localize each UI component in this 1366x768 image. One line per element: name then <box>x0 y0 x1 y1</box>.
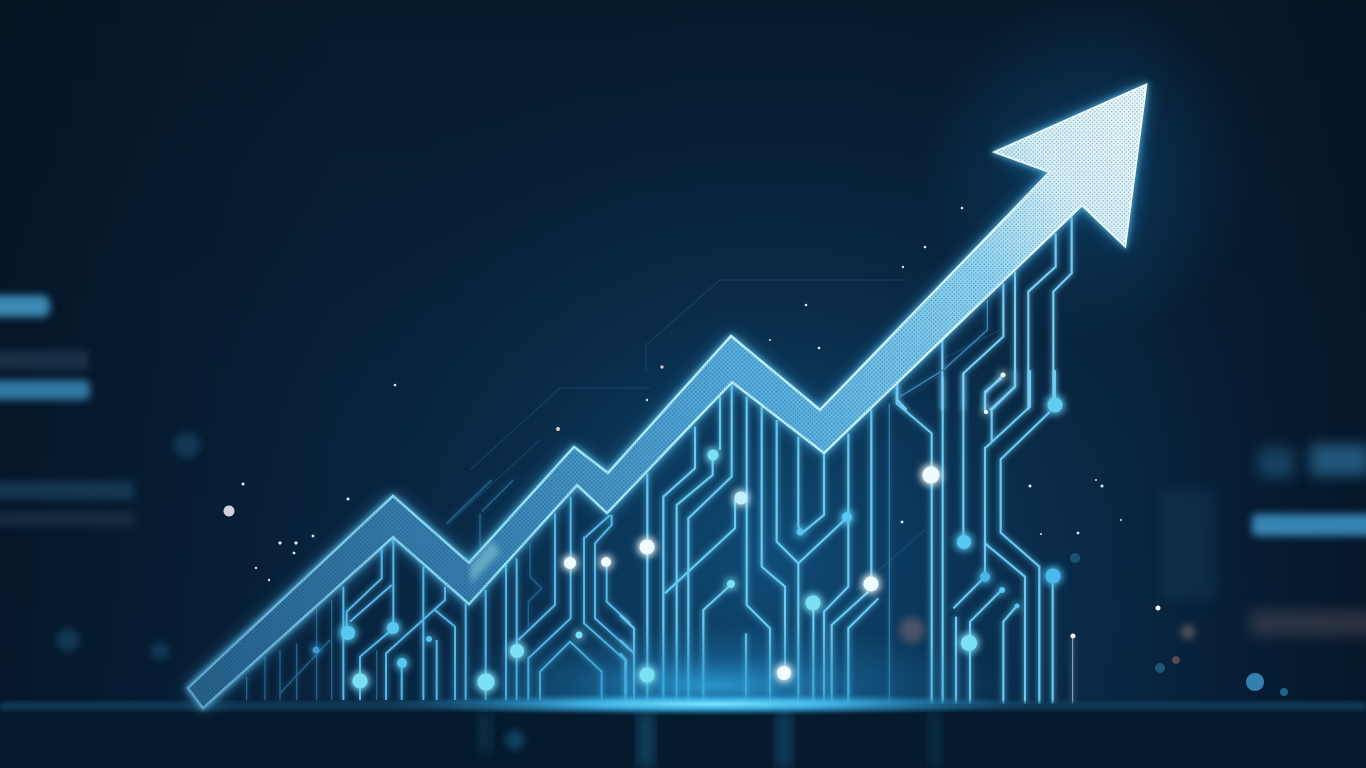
bright traces <box>343 497 630 700</box>
circuit traces: left section <box>247 480 630 700</box>
arrow wide glow <box>188 85 1146 708</box>
faint background circuit lines <box>447 280 1000 590</box>
floor glow <box>0 623 1366 768</box>
sparkle particles <box>224 207 1160 638</box>
blurred city lights: right <box>899 444 1366 747</box>
growth arrow <box>188 85 1146 708</box>
arrow dot texture <box>188 85 1146 708</box>
circuit traces: upper right under the arrow <box>897 217 1072 410</box>
arrow body <box>188 85 1146 708</box>
bright valley accent <box>470 541 500 584</box>
circuit traces: centre and right section <box>620 370 1073 703</box>
circuit nodes <box>312 372 1062 690</box>
blurred city lights: left <box>0 295 256 764</box>
arrow tight glow <box>188 85 1146 708</box>
dim traces <box>247 480 542 700</box>
